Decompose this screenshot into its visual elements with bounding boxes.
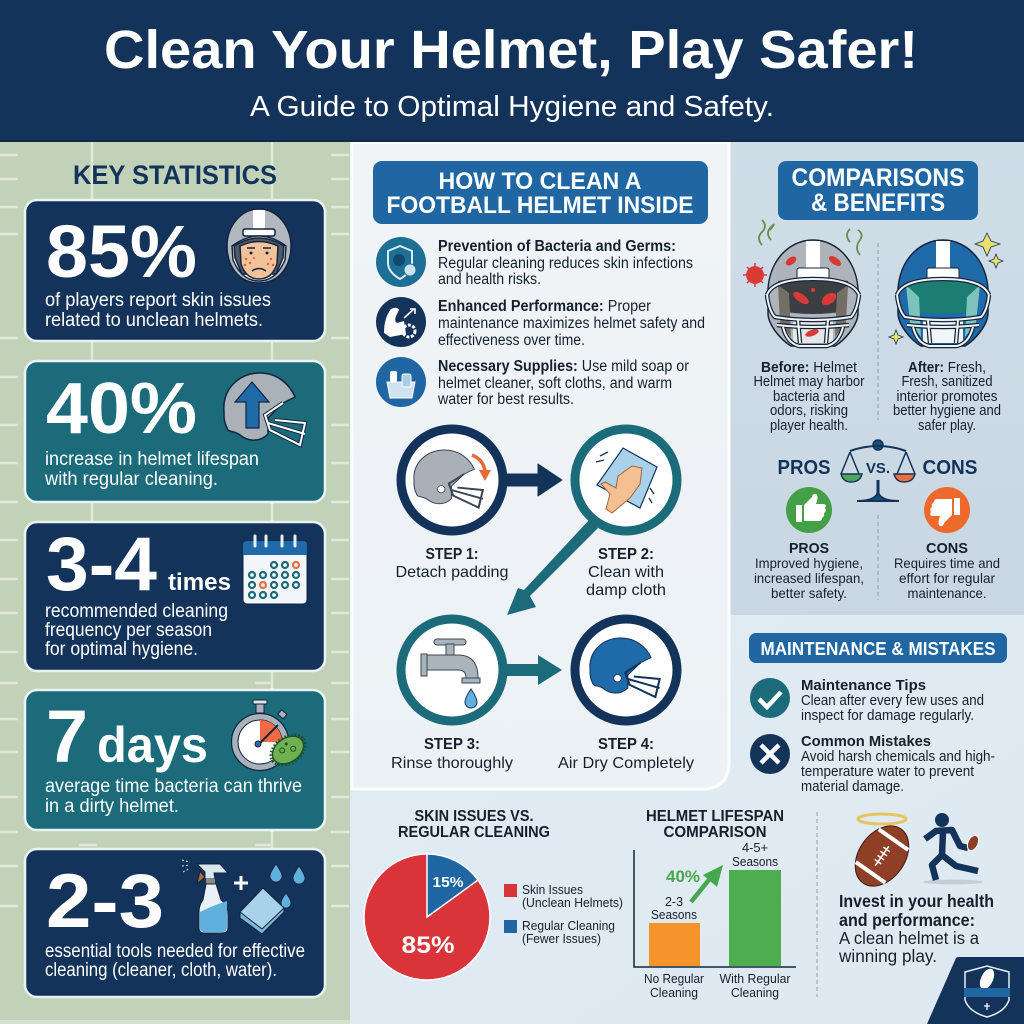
- text: after: After: Fresh,: [908, 360, 986, 376]
- text: enhanced performance: Enhanced Performance: Proper: [438, 298, 651, 315]
- icon: running player: [923, 813, 983, 884]
- text: maintenance tips: inspect for damage regularly.: [801, 708, 974, 724]
- text: common mistakes: [801, 733, 995, 795]
- text: pros: increased lifespan,: [754, 570, 864, 586]
- step 4: STEP 4:: [598, 736, 654, 753]
- step 3: Rinse thoroughly: [391, 755, 513, 772]
- stat card: 40%: [25, 361, 325, 502]
- text: prevention of bacteria: and health risks.: [438, 271, 541, 288]
- icon: shield with football: [964, 966, 1010, 1017]
- text: invest: and performance:: [839, 910, 975, 930]
- text: cons: effort for regular: [899, 570, 995, 586]
- bar chart: 2-3: [665, 895, 683, 909]
- text: necessary supplies: Necessary Supplies: Use mild soap or: [438, 358, 689, 375]
- pie chart: 85%: [402, 932, 454, 959]
- icon: faucet: [421, 639, 480, 708]
- text: common mistakes: temperature water to prevent: [801, 764, 974, 780]
- stat card: 2-3: 2-3: [46, 859, 164, 944]
- panel: field background: [0, 142, 350, 1024]
- stat card: 40%: 40%: [46, 369, 197, 449]
- icon: hand with cloth: [596, 448, 657, 513]
- pros versus cons balance: VS.: [866, 460, 890, 477]
- heading: lifespan chart: HELMET LIFESPAN: [646, 808, 784, 825]
- arrow: step 1 to step 2: [506, 464, 562, 496]
- step 2: [575, 429, 677, 599]
- stat card: 85%: [25, 200, 325, 341]
- stat card: 85%: related to unclean helmets.: [45, 310, 263, 331]
- divider: [816, 812, 818, 997]
- text: pros: PROS: [789, 540, 829, 557]
- text: before: player health.: [770, 418, 848, 434]
- stat card: 85%: 85%: [46, 210, 197, 293]
- stat card: 85%: of players report skin issues: [45, 290, 271, 311]
- arrow: step 2 to step 3: [507, 520, 598, 615]
- icon: dirty helmet: [767, 240, 859, 346]
- arrow: step 3 to step 4: [506, 655, 562, 685]
- step 1: [396, 429, 508, 581]
- text: after: Fresh, sanitized: [902, 374, 992, 390]
- icon: thumbs up: [786, 487, 832, 533]
- icon: clean helmet: [897, 240, 989, 346]
- stat card: 7 days: 7: [46, 695, 88, 778]
- stat card: 3-4 times: recommended cleaning: [45, 601, 228, 622]
- legend: (Unclean Helmets): [522, 896, 623, 910]
- text: enhanced performance: maintenance maximizes helmet safety and: [438, 315, 705, 332]
- heading: how to clean: FOOTBALL HELMET INSIDE: [386, 192, 694, 219]
- heading: lifespan chart: [646, 808, 784, 841]
- bar chart: No Regular: [644, 972, 704, 986]
- text: before: Before: Helmet: [761, 360, 857, 376]
- text: after: [893, 360, 1001, 434]
- text: invest: [838, 891, 994, 966]
- icon: calendar: [243, 536, 307, 604]
- text: maintenance tips: [801, 677, 984, 724]
- text: before: odors, risking: [770, 403, 848, 419]
- bar chart: Seasons: [732, 855, 778, 869]
- stat card: 3-4 times: frequency per season: [45, 620, 212, 641]
- bar chart: 40%: [666, 867, 700, 886]
- heading: how to clean: [373, 161, 708, 224]
- text: maintenance tips: Clean after every few uses and: [801, 693, 984, 709]
- text: pros: [754, 540, 864, 601]
- stat card: 7 days: average time bacteria can thrive: [45, 776, 302, 797]
- heading: key statistics: KEY STATISTICS: [73, 160, 277, 190]
- stat card: 2-3: [25, 849, 325, 997]
- stat card: 2-3: cleaning (cleaner, cloth, water).: [45, 960, 277, 981]
- stat card: 7 days: in a dirty helmet.: [45, 796, 179, 817]
- stat card: 2-3: essential tools needed for effective: [45, 941, 305, 962]
- text: maintenance tips: Maintenance Tips: [801, 677, 926, 694]
- icon: sparkles: [889, 233, 1003, 344]
- text: necessary supplies: [437, 358, 689, 408]
- icon: shield and germ: [376, 237, 426, 287]
- step 2: damp cloth: [586, 582, 666, 599]
- legend: (Fewer Issues): [522, 932, 601, 946]
- stat card: 7 days: days: [97, 717, 208, 773]
- text: before: [754, 360, 865, 434]
- text: enhanced performance: effectiveness over time.: [438, 332, 585, 349]
- text: enhanced performance: [438, 298, 705, 349]
- text: common mistakes: material damage.: [801, 779, 904, 795]
- bar chart: With Regular: [720, 972, 790, 986]
- text: prevention of bacteria: Regular cleaning reduces skin infections: [438, 255, 693, 272]
- legend: [504, 883, 623, 946]
- icon: thumbs down: [924, 487, 970, 533]
- heading: comparisons and benefits: COMPARISONS: [792, 164, 964, 192]
- heading: maintenance and mistakes: [749, 633, 1007, 663]
- text: before: Helmet may harbor: [754, 374, 865, 390]
- pros versus cons balance: PROS: [778, 457, 830, 479]
- pros versus cons balance: CONS: [922, 457, 978, 479]
- icon: football with halo: [844, 814, 920, 896]
- bar chart: Cleaning: [650, 986, 698, 1000]
- heading: skin issues chart: [398, 808, 550, 841]
- header: [0, 0, 1024, 142]
- stat card: 3-4 times: for optimal hygiene.: [45, 639, 198, 660]
- text: pros: better safety.: [771, 585, 847, 601]
- text: common mistakes: Common Mistakes: [801, 733, 931, 750]
- icon: player face in helmet: [227, 209, 291, 283]
- icon: stopwatch with bacteria: [232, 700, 311, 772]
- text: before: bacteria and: [773, 389, 845, 405]
- text: prevention of bacteria: Prevention of Bacteria and Germs:: [438, 238, 676, 255]
- bar chart: Seasons: [651, 908, 697, 922]
- icon: cross: [750, 734, 790, 774]
- pros versus cons balance: [778, 440, 978, 501]
- step 4: [558, 619, 694, 772]
- text: pros: Improved hygiene,: [755, 555, 863, 571]
- subtitle: A Guide to Optimal Hygiene and Safety.: [250, 91, 774, 123]
- heading: lifespan chart: COMPARISON: [664, 824, 766, 841]
- heading: skin issues chart: SKIN ISSUES VS.: [414, 808, 534, 825]
- pie chart: [364, 854, 490, 980]
- stat card: 7 days: [25, 690, 325, 830]
- stat card: 40%: increase in helmet lifespan: [45, 449, 259, 470]
- step 4: Air Dry Completely: [558, 755, 694, 772]
- dashed dividers: [877, 243, 879, 600]
- text: cons: [894, 540, 1000, 601]
- pie chart: 15%: [432, 874, 464, 891]
- step 3: [391, 619, 513, 772]
- text: cons: Requires time and: [894, 555, 1000, 571]
- icon: helmet with up arrow: [224, 373, 305, 445]
- heading: skin issues chart: REGULAR CLEANING: [398, 824, 550, 841]
- icon: cleaning supplies: [376, 357, 426, 407]
- icon: spray bottle, cloth and drops: [182, 860, 305, 934]
- arrow: growth: [691, 865, 723, 902]
- step 1: STEP 1:: [426, 546, 478, 563]
- stat card: 3-4 times: 3-4: [46, 522, 157, 607]
- step 2: Clean with: [588, 564, 664, 581]
- icon: blue helmet: [590, 638, 660, 697]
- title: Clean Your Helmet, Play Safer!: [104, 20, 918, 80]
- step 2: STEP 2:: [598, 546, 654, 563]
- legend: Regular Cleaning: [522, 919, 615, 933]
- heading: comparisons and benefits: [778, 161, 978, 220]
- bar chart: 4-5+: [742, 841, 768, 855]
- text: common mistakes: Avoid harsh chemicals and high-: [801, 749, 995, 765]
- text: after: safer play.: [918, 418, 976, 434]
- step 1: Detach padding: [396, 564, 508, 581]
- heading: maintenance and mistakes: MAINTENANCE & MISTAKES: [760, 639, 996, 659]
- heading: comparisons and benefits: & BENEFITS: [811, 189, 945, 217]
- text: after: interior promotes: [896, 389, 998, 405]
- text: necessary supplies: helmet cleaner, soft cloths, and warm: [438, 375, 672, 392]
- legend: Skin Issues: [522, 883, 583, 897]
- heading: how to clean: HOW TO CLEAN A: [438, 168, 642, 195]
- stat card: 40%: with regular cleaning.: [44, 469, 218, 490]
- step 3: STEP 3:: [424, 736, 480, 753]
- text: invest: Invest in your health: [839, 891, 994, 911]
- panel: how to clean background: [352, 142, 729, 789]
- stat card: 3-4 times: [25, 522, 325, 671]
- bar chart: [634, 841, 796, 1000]
- stat card: 3-4 times: times: [168, 569, 231, 596]
- text: invest: A clean helmet is a: [839, 928, 979, 948]
- text: cons: CONS: [926, 540, 968, 557]
- text: prevention of bacteria: [438, 238, 693, 288]
- bar chart: Cleaning: [731, 986, 779, 1000]
- icon: arm and gear: [376, 297, 426, 347]
- panel: lower area background: [352, 615, 1024, 1024]
- icon: check: [750, 678, 790, 718]
- text: invest: winning play.: [838, 946, 937, 966]
- icon: stink lines and germ: [743, 220, 862, 287]
- text: necessary supplies: water for best results.: [437, 391, 574, 408]
- text: cons: maintenance.: [908, 585, 986, 601]
- corner badge: [927, 957, 1024, 1024]
- text: after: better hygiene and: [893, 403, 1001, 419]
- icon: grey helmet: [414, 450, 483, 508]
- panel: right comparisons background: [730, 142, 1024, 615]
- icon: scale: [841, 440, 915, 501]
